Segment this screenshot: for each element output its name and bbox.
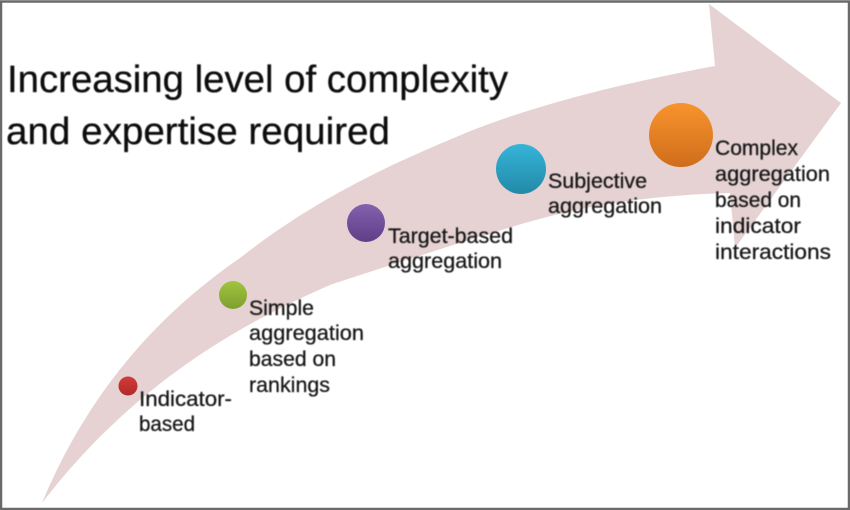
step 2: simple aggregation: aggregation — [249, 322, 364, 345]
step 5: complex aggregation: based on — [715, 189, 801, 212]
step 5: complex aggregation: indicator — [715, 215, 801, 238]
step 4: subjective aggregation: Subjective — [548, 170, 647, 193]
title: Increasing level of complexity — [7, 59, 508, 101]
step 1: indicator-based: based — [139, 413, 195, 436]
step 5: complex aggregation — [649, 103, 831, 264]
step 1: indicator-based: Indicator- — [139, 388, 232, 411]
step 2: simple aggregation: Simple — [249, 297, 314, 320]
step 1: indicator-based — [118, 376, 232, 436]
step 3: target-based aggregation — [347, 204, 513, 273]
title: and expertise required — [6, 111, 390, 153]
step 3: target-based aggregation: Target-based — [388, 225, 513, 248]
step 2: simple aggregation: based on — [249, 348, 336, 371]
step 2: simple aggregation: rankings — [249, 374, 330, 397]
step 4: subjective aggregation: aggregation — [548, 195, 662, 218]
step 2: simple aggregation — [219, 281, 364, 397]
title — [6, 59, 508, 153]
step 3: target-based aggregation: aggregation — [388, 250, 502, 273]
step 5: complex aggregation: aggregation — [715, 163, 830, 186]
step 5: complex aggregation: Complex — [715, 137, 798, 160]
step 4: subjective aggregation — [496, 144, 662, 218]
step 5: complex aggregation: interactions — [715, 241, 831, 264]
